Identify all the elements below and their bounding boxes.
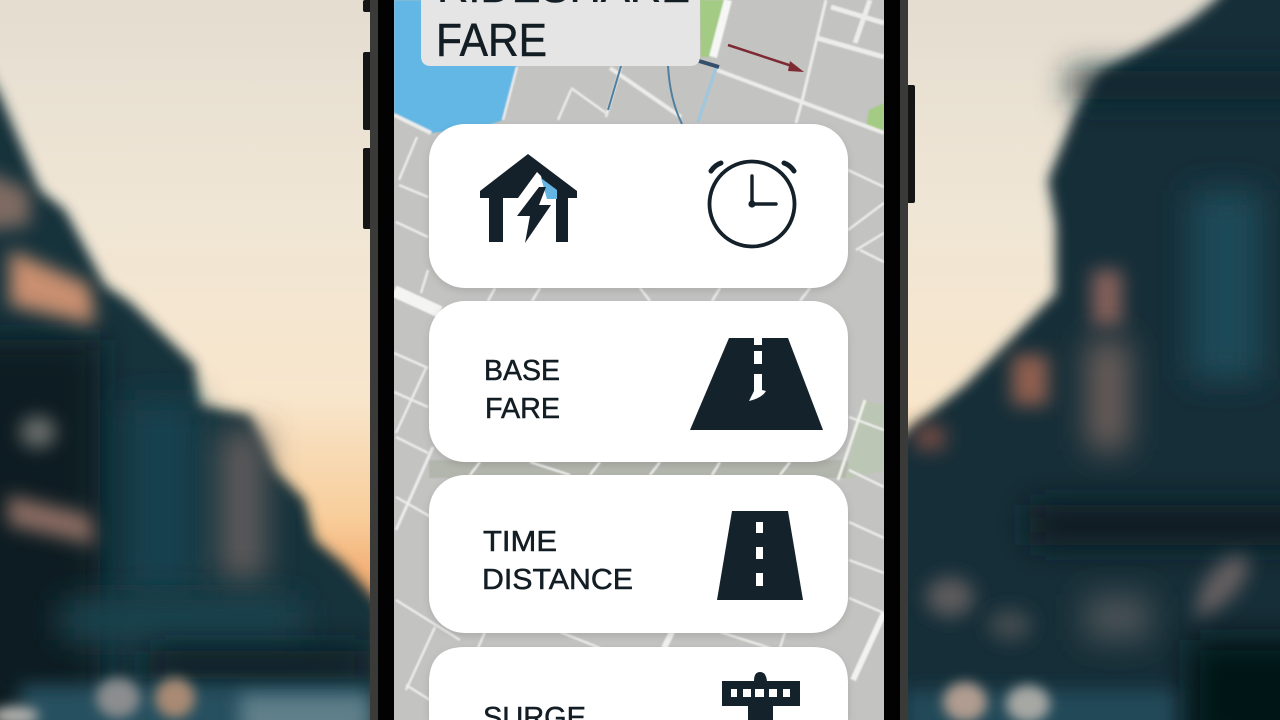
- phone side buttons: [363, 0, 915, 229]
- card: surge and time icons: [429, 124, 848, 288]
- text: time distance: DISTANCE: [482, 564, 633, 596]
- map water: [394, 0, 530, 133]
- text: time distance: TIME: [483, 526, 557, 558]
- background: blurred city buildings left: [0, 40, 380, 720]
- title box: [421, 0, 700, 66]
- icon: house with lightning bolt: [480, 154, 577, 245]
- card: base fare: [429, 301, 848, 462]
- map route lines: [608, 61, 719, 124]
- map red arrow: [728, 45, 804, 72]
- icon: straight road: [717, 511, 803, 600]
- phone: [363, 0, 915, 720]
- icon: road sign gantry: [722, 672, 800, 720]
- card: surge: [429, 647, 848, 720]
- map parks: [700, 0, 884, 480]
- title: rideshare fare: [436, 0, 690, 66]
- phone body: [370, 0, 908, 720]
- text: base fare: [484, 355, 560, 425]
- title: rideshare fare: FARE: [436, 14, 547, 66]
- text: base fare: BASE: [484, 355, 560, 387]
- background: blurred city buildings right: [895, 0, 1280, 720]
- text: base fare: FARE: [485, 393, 560, 425]
- icon: alarm clock: [710, 162, 794, 246]
- map screen: [394, 0, 884, 720]
- map tinted strip: [429, 460, 848, 478]
- card: time distance: [429, 475, 848, 633]
- map streets: [394, 0, 884, 700]
- icon: road with cracked lane: [690, 338, 823, 430]
- text: time distance: [482, 526, 633, 596]
